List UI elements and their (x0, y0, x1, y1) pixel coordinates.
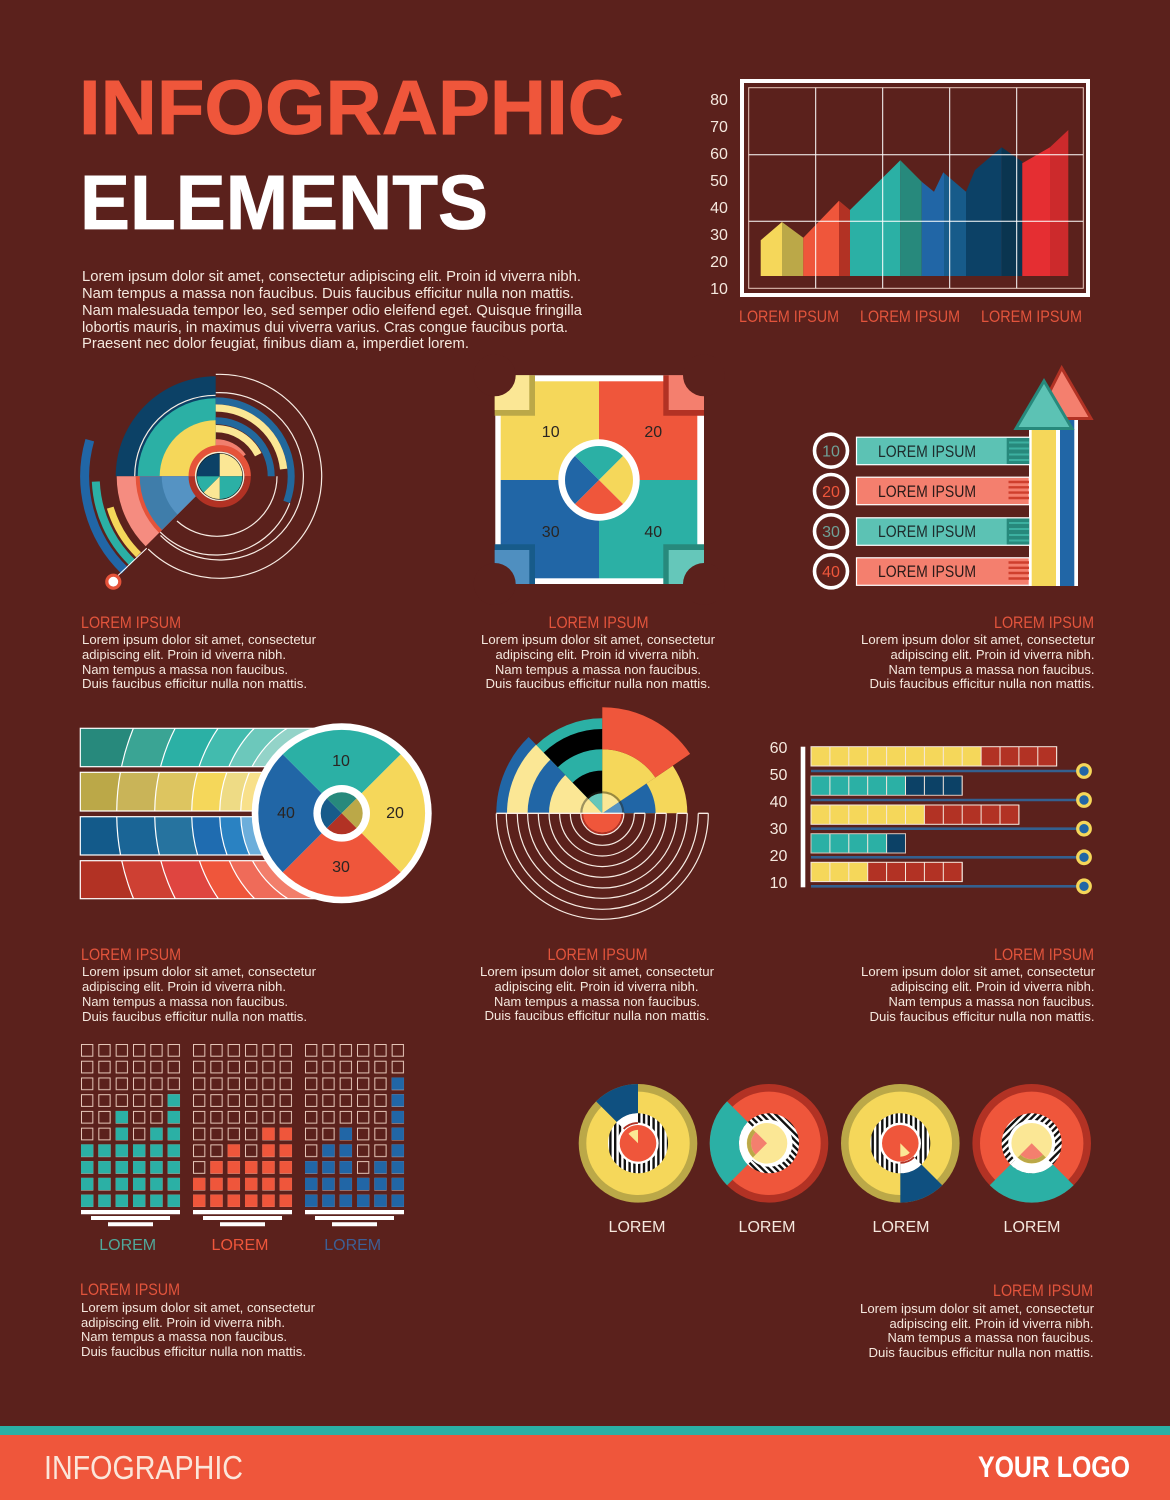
radial pointer with end dot (107, 548, 147, 588)
caption: arrow banners: Nam tempus a massa non faucibus. (888, 662, 1094, 677)
square numbers: 10 (542, 424, 560, 441)
caption: arrow banners (861, 614, 1096, 691)
banner row 20 (814, 474, 1029, 508)
caption: ribbon pie (81, 946, 317, 1024)
caption: square chart: Duis faucibus efficitur nulla non mattis. (486, 676, 710, 691)
radial lower left arcs (30, 291, 401, 662)
semicircle hub (581, 789, 625, 834)
caption: segmented bars: LOREM IPSUM (994, 946, 1094, 964)
donut 2 (685, 1084, 828, 1236)
caption: radial chart: adipiscing elit. Proin id viverra nibh. (82, 647, 286, 662)
donut 3 (841, 1084, 960, 1236)
caption: semicircle: Lorem ipsum dolor sit amet, consectetur (480, 964, 715, 979)
bar axis labels: 60 (770, 740, 788, 757)
radial right arcs (140, 401, 291, 552)
caption: radial chart: LOREM IPSUM (81, 614, 181, 632)
chart y axis labels: 80 (710, 92, 728, 109)
chart y axis labels: 60 (710, 146, 728, 163)
semicircle right sector (517, 728, 699, 898)
yellow arrow (1016, 381, 1072, 586)
caption: square chart: Nam tempus a massa non faucibus. (495, 662, 701, 677)
radial wedges top left (116, 376, 216, 476)
donut 1: LOREM (609, 1219, 665, 1236)
ribbon pie numbers: 30 (332, 859, 350, 876)
caption: square chart: adipiscing elit. Proin id viverra nibh. (496, 647, 700, 662)
caption: square chart: Lorem ipsum dolor sit amet, consectetur (481, 632, 716, 647)
square white frame (495, 375, 704, 584)
banner row 10 (814, 434, 1029, 467)
banner row 30: 30 (822, 524, 840, 541)
caption: pictogram grids (80, 1281, 316, 1359)
bar axis labels: 10 (770, 875, 788, 892)
caption: pictogram grids: Nam tempus a massa non faucibus. (81, 1329, 287, 1344)
donut 2: LOREM (739, 1219, 795, 1236)
chart y axis labels: 70 (710, 119, 728, 136)
donut 4: LOREM (1004, 1219, 1060, 1236)
caption: radial chart (81, 614, 317, 691)
chart y axis labels: 20 (710, 254, 728, 271)
caption: segmented bars: Lorem ipsum dolor sit amet, consectetur (861, 964, 1096, 979)
bar axis labels: 20 (770, 848, 788, 865)
semicircle white rings (496, 707, 708, 919)
semicircle chart (496, 699, 708, 919)
ribbon pie numbers: 10 (332, 753, 350, 770)
semicircle left sector (496, 737, 602, 813)
bar row 40 (810, 805, 1020, 824)
chart y axis labels (710, 92, 728, 298)
chart x labels: LOREM IPSUM (860, 308, 960, 326)
caption: pictogram grids: Duis faucibus efficitur nulla non mattis. (81, 1344, 306, 1359)
bar row 30 (810, 834, 906, 853)
intro text block: Lorem ipsum dolor sit amet, consectetur adipiscing elit. Proin id viverra nibh. (82, 269, 581, 285)
caption: arrow banners: LOREM IPSUM (994, 614, 1094, 632)
banner row 20: 20 (822, 484, 840, 501)
caption: segmented bars: adipiscing elit. Proin id viverra nibh. (890, 979, 1094, 994)
caption: arrow banners: adipiscing elit. Proin id viverra nibh. (890, 647, 1094, 662)
pictogram grid teal: LOREM (99, 1237, 156, 1254)
caption: segmented bars: Nam tempus a massa non faucibus. (888, 994, 1094, 1009)
banner row 10: 10 (822, 444, 840, 460)
bar row 20 (810, 862, 963, 882)
radial wedges bottom left (96, 427, 216, 546)
donut 4 (972, 1084, 1091, 1236)
ribbon pie numbers: 40 (277, 805, 295, 822)
footer logo: YOUR LOGO (978, 1451, 1130, 1484)
bar row 50 (810, 776, 963, 795)
caption: semicircle: Nam tempus a massa non faucibus. (494, 994, 700, 1009)
caption: ribbon pie: LOREM IPSUM (81, 946, 181, 964)
intro text block: Nam malesuada tempor leo, sed semper odio eleifend eget. Quisque fringilla (82, 303, 583, 319)
caption: semicircle: LOREM IPSUM (548, 946, 648, 964)
blue arrow (1036, 368, 1091, 586)
pictogram grid blue (305, 1044, 404, 1254)
bar axis labels (770, 740, 788, 892)
banner row 40: LOREM IPSUM (878, 563, 976, 581)
caption: ribbon pie: Lorem ipsum dolor sit amet, consectetur (82, 964, 317, 979)
intro text block (82, 269, 583, 352)
banner row 30: LOREM IPSUM (878, 523, 976, 541)
radial thin rings (114, 370, 326, 582)
square quadrants (501, 381, 697, 578)
area chart (710, 81, 1088, 326)
title: INFOGRAPHIC (79, 65, 624, 151)
bar axis labels: 40 (770, 794, 788, 811)
caption: segmented bars: Duis faucibus efficitur nulla non mattis. (870, 1009, 1094, 1024)
caption: donuts: adipiscing elit. Proin id viverra nibh. (890, 1316, 1094, 1331)
footer band (0, 1426, 1170, 1500)
ribbon pie (224, 695, 460, 931)
donut 3: LOREM (873, 1219, 929, 1236)
caption: ribbon pie: Duis faucibus efficitur nulla non mattis. (82, 1009, 307, 1024)
radial center hub (192, 448, 248, 504)
bar row 60 (810, 747, 1057, 766)
square numbers: 20 (644, 424, 662, 441)
pictogram grid blue: LOREM (324, 1237, 381, 1254)
footer title: INFOGRAPHIC (44, 1449, 243, 1486)
square quadrant chart (474, 354, 725, 605)
caption: donuts: Nam tempus a massa non faucibus. (888, 1330, 1094, 1345)
caption: segmented bars (861, 946, 1096, 1024)
banner row 40: 40 (822, 564, 840, 581)
square numbers: 30 (542, 524, 560, 541)
caption: donuts: Duis faucibus efficitur nulla non mattis. (868, 1345, 1094, 1360)
caption: radial chart: Nam tempus a massa non faucibus. (82, 662, 288, 677)
caption: semicircle: adipiscing elit. Proin id viverra nibh. (494, 979, 698, 994)
banner row 40 (814, 555, 1029, 588)
caption: donuts: Lorem ipsum dolor sit amet, consectetur (860, 1301, 1095, 1316)
caption: square chart: LOREM IPSUM (548, 614, 648, 632)
banner row 10: LOREM IPSUM (878, 443, 976, 461)
bar axis labels: 30 (770, 821, 788, 838)
square corner tabs (474, 354, 725, 605)
pictogram grid teal (81, 1044, 180, 1254)
bar axis labels: 50 (770, 767, 788, 784)
donut 1 (579, 1072, 697, 1236)
chart y axis labels: 50 (710, 173, 728, 190)
ribbon pie chart (80, 723, 432, 904)
caption: arrow banners: Duis faucibus efficitur nulla non mattis. (870, 676, 1094, 691)
arrow banner chart (814, 368, 1091, 588)
square numbers (542, 424, 662, 541)
title: ELEMENTS (80, 160, 488, 246)
intro text block: Praesent nec dolor feugiat, finibus diam a, imperdiet lorem. (82, 336, 469, 352)
caption: semicircle (480, 946, 715, 1023)
chart areas (761, 130, 1068, 276)
ribbon bars (80, 728, 316, 900)
intro text block: Nam tempus a massa non faucibus. Duis faucibus efficitur nulla non mattis. (82, 286, 574, 302)
bar leader lines and dots (811, 765, 1090, 893)
caption: radial chart: Duis faucibus efficitur nulla non mattis. (82, 676, 307, 691)
bar axis (801, 747, 805, 887)
caption: pictogram grids: LOREM IPSUM (80, 1281, 180, 1299)
intro text block: lobortis mauris, in maximus dui viverra varius. Cras congue faucibus porta. (82, 320, 568, 336)
caption: arrow banners: Lorem ipsum dolor sit amet, consectetur (861, 632, 1096, 647)
chart y axis labels: 30 (710, 227, 728, 244)
caption: square chart (481, 614, 716, 691)
caption: semicircle: Duis faucibus efficitur nulla non mattis. (484, 1008, 710, 1023)
pictogram grid orange (193, 1044, 292, 1254)
semicircle top sector (536, 699, 650, 813)
chart y axis labels: 40 (710, 200, 728, 217)
pictogram grid orange: LOREM (212, 1237, 268, 1254)
banner row 20: LOREM IPSUM (878, 483, 976, 501)
chart x labels: LOREM IPSUM (981, 308, 1082, 326)
caption: pictogram grids: Lorem ipsum dolor sit amet, consectetur (81, 1300, 316, 1315)
segmented bar chart (770, 740, 1090, 893)
caption: donuts: LOREM IPSUM (993, 1282, 1093, 1300)
caption: radial chart: Lorem ipsum dolor sit amet, consectetur (82, 632, 317, 647)
title (79, 65, 624, 246)
radial chart (30, 291, 401, 662)
caption: ribbon pie: Nam tempus a massa non faucibus. (82, 994, 288, 1009)
square center pie (551, 432, 647, 528)
square numbers: 40 (644, 524, 662, 541)
caption: donuts (860, 1282, 1095, 1360)
caption: pictogram grids: adipiscing elit. Proin id viverra nibh. (81, 1315, 285, 1330)
ribbon pie numbers (277, 753, 404, 876)
ribbon pie numbers: 20 (386, 805, 404, 822)
caption: ribbon pie: adipiscing elit. Proin id viverra nibh. (82, 979, 286, 994)
chart x labels: LOREM IPSUM (739, 308, 839, 326)
banner row 30 (814, 515, 1029, 548)
chart x labels (739, 308, 1082, 326)
chart grid and frame (742, 81, 1088, 295)
chart y axis labels: 10 (710, 281, 728, 298)
